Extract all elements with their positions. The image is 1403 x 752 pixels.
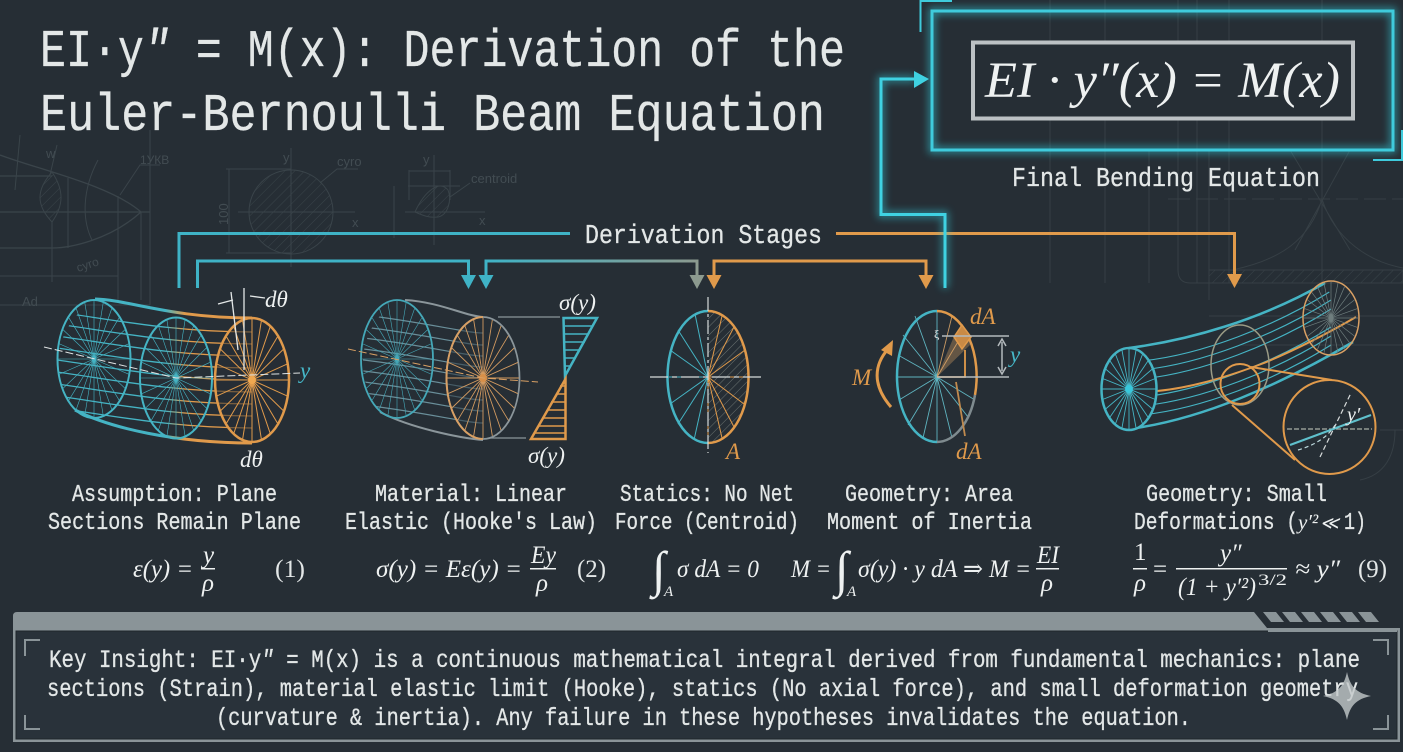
stage 4 label xyxy=(827,482,1032,537)
blueprint background labels: centroid xyxy=(471,171,517,186)
equation 9: 3/2 xyxy=(1258,572,1287,589)
equation 3: A xyxy=(663,584,674,600)
equation 2: (2) xyxy=(577,556,606,583)
stage 5 label xyxy=(1134,482,1366,537)
labels: area moment: y xyxy=(1008,342,1021,367)
arrow: material to statics xyxy=(478,261,704,289)
stage 5 label: Deformations ( xyxy=(1134,510,1298,537)
stress leaders xyxy=(490,317,560,438)
equation 9: 1 xyxy=(1134,539,1146,566)
hazard stripes xyxy=(1263,612,1379,622)
label: A: A xyxy=(724,439,741,464)
stress triangle: tension xyxy=(564,318,597,376)
middle section xyxy=(140,318,212,438)
equation 1: ε(y) = xyxy=(133,556,193,583)
diagram: statics cross-section xyxy=(650,297,765,453)
arrow: geometry up to final equation xyxy=(881,71,945,288)
stage 5 label: Geometry: Small xyxy=(1146,482,1327,509)
equation box xyxy=(973,42,1353,118)
equation 4: M = xyxy=(790,556,831,583)
icon: sparkle xyxy=(1323,672,1371,720)
equation 1 xyxy=(133,542,305,597)
equation box: EI · y″(x) = M(x) xyxy=(984,53,1340,109)
panel frame xyxy=(13,612,1400,742)
blueprint background labels: y xyxy=(423,152,430,167)
stage 3 label: Statics: No Net xyxy=(620,482,794,509)
connector: plane sections to heading xyxy=(179,234,570,288)
tube longitudinal lines xyxy=(50,299,252,443)
labels: area moment: dA xyxy=(956,439,982,464)
title xyxy=(40,22,845,146)
blueprint background labels: w xyxy=(45,146,56,161)
equation 2 xyxy=(376,542,606,597)
centre axis xyxy=(44,347,300,378)
stage 4 label: Geometry: Area xyxy=(845,482,1013,509)
equation 4: A xyxy=(846,584,857,600)
labels: area moment xyxy=(851,304,1021,464)
equation 2: ρ xyxy=(535,570,548,597)
stage 1 label: Assumption: Plane xyxy=(72,482,277,509)
blueprint background labels: cyro xyxy=(337,154,362,169)
front section xyxy=(215,318,289,442)
stage 5 label: 1) xyxy=(1344,510,1366,537)
title: EI·y″ = M(x): Derivation of the xyxy=(40,22,845,82)
equation 3: ∫ xyxy=(649,541,669,600)
arrow: statics to geometry xyxy=(706,261,934,289)
labels: plane sections tube: dθ xyxy=(265,287,288,312)
longitudinal lines xyxy=(355,300,483,440)
labels: stress: σ(y) xyxy=(528,443,565,468)
equation 4: ∫ xyxy=(832,541,852,600)
heading: derivation stages: Derivation Stages xyxy=(585,222,822,252)
blueprint background: left drawings xyxy=(0,130,485,305)
moment arrow xyxy=(877,349,891,407)
rear section xyxy=(361,300,433,418)
labels: stress: σ(y) xyxy=(559,290,596,315)
labels: plane sections tube xyxy=(240,287,311,472)
blueprint background labels: 1УКВ xyxy=(140,153,169,167)
blueprint background labels: x xyxy=(352,215,359,230)
equation 3: σ dA = 0 xyxy=(677,556,759,583)
stage 4 label: Moment of Inertia xyxy=(827,510,1032,537)
equation 9: ρ xyxy=(1133,570,1146,597)
equation 4 xyxy=(790,541,1061,600)
magnifier xyxy=(1220,364,1376,474)
labels: stress xyxy=(528,290,596,468)
stress triangle: compression xyxy=(531,379,566,439)
stage 3 label xyxy=(615,482,799,537)
panel: final bending equation xyxy=(920,1,1402,160)
equation 3 xyxy=(649,541,759,600)
blueprint background labels: x xyxy=(479,213,486,228)
blueprint background: right drawings xyxy=(1050,0,1403,480)
stage 5 label: y′² xyxy=(1296,510,1319,534)
dθ angle marks xyxy=(218,288,265,370)
labels: plane sections tube: dθ xyxy=(240,447,263,472)
dA leader xyxy=(956,382,965,436)
equation 2: Ey xyxy=(530,542,557,569)
labels: area moment: M xyxy=(851,365,873,390)
rear section xyxy=(58,300,130,418)
equation 1: y xyxy=(200,542,215,569)
stage 5 label: ≪ xyxy=(1320,513,1341,533)
diagram: plane sections tube xyxy=(44,288,300,443)
stage 2 label: Material: Linear xyxy=(375,482,567,509)
stage 2 label: Elastic (Hooke's Law) xyxy=(345,510,597,537)
front section xyxy=(446,317,520,439)
stage 2 label xyxy=(345,482,597,537)
stage 3 label: Force (Centroid) xyxy=(615,510,799,537)
near section xyxy=(1102,348,1156,430)
blueprint background labels: y xyxy=(283,150,290,165)
blueprint background labels: Ad xyxy=(22,294,38,309)
stage 1 label xyxy=(48,482,301,537)
equation 4: σ(y) · y dA ⇒ M = xyxy=(858,556,1031,583)
panel: key insight xyxy=(13,612,1400,742)
equation 9: y″ xyxy=(1217,540,1242,567)
y dimension xyxy=(937,336,1009,377)
labels: plane sections tube: y xyxy=(298,358,311,383)
equation 4: ρ xyxy=(1040,570,1053,597)
insight text: (curvature & inertia). Any failure in these hypotheses invalidates the equation. xyxy=(216,704,1191,733)
title: Euler-Bernoulli Beam Equation xyxy=(40,86,825,146)
arrow: heading to small deformations xyxy=(836,234,1242,288)
corner brackets xyxy=(25,640,1388,729)
equation 9 xyxy=(1133,539,1387,601)
stage labels xyxy=(48,482,1366,537)
arrow: plane sections to material xyxy=(198,261,476,289)
caption: final bending equation: Final Bending Equation xyxy=(1012,165,1320,195)
label: y prime: y′ xyxy=(1345,404,1361,426)
labels: area moment: ξ xyxy=(934,327,940,341)
equation 2: σ(y) = Eε(y) = xyxy=(376,556,522,583)
middle section xyxy=(1211,325,1269,405)
diagram: area moment of inertia xyxy=(877,311,1009,443)
longitudinal lines xyxy=(1129,283,1353,429)
equation 1: ρ xyxy=(201,570,214,597)
far section xyxy=(1303,281,1359,355)
equation 9: = xyxy=(1153,556,1167,583)
blueprint background labels xyxy=(22,146,517,309)
equation 9: ≈ y″ xyxy=(1295,556,1341,583)
equation 9: (9) xyxy=(1358,556,1387,583)
blueprint background labels: cyro xyxy=(75,254,101,275)
equation 4: EI xyxy=(1036,542,1061,569)
stage 1 label: Sections Remain Plane xyxy=(48,510,301,537)
insight text xyxy=(47,646,1360,733)
diagram: small deformation beam xyxy=(1102,281,1376,474)
blueprint background labels: 100 xyxy=(216,203,231,225)
diagram: linear elastic tube xyxy=(348,300,597,440)
dA element xyxy=(954,325,971,349)
labels: area moment: dA xyxy=(970,304,996,329)
equation 9: (1 + y′²) xyxy=(1178,574,1256,601)
equation 1: (1) xyxy=(275,556,305,583)
